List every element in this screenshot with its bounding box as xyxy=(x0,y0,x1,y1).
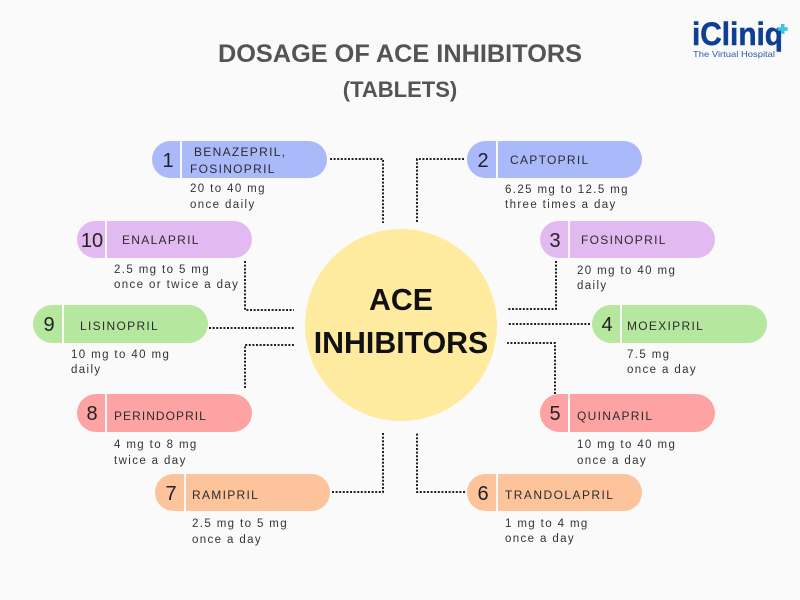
item 8: perindopril xyxy=(77,394,252,467)
central circle: ACE inhibitors: INHIBITORS xyxy=(314,327,488,360)
item 10: enalapril: 10 xyxy=(81,230,103,252)
item 10: enalapril xyxy=(77,221,252,291)
item 8: perindopril: 4 mg to 8 mg xyxy=(114,439,198,451)
item 6: trandolapril: TRANDOLAPRIL xyxy=(505,488,614,502)
logo: iCliniq: iCliniq xyxy=(692,16,783,52)
item 2: captopril: 6.25 mg to 12.5 mg xyxy=(505,184,629,196)
item 3: fosinopril: FOSINOPRIL xyxy=(581,233,667,247)
central circle: ACE inhibitors xyxy=(305,229,497,421)
item 3: fosinopril: 20 mg to 40 mg xyxy=(577,265,676,277)
item 6: trandolapril: once a day xyxy=(505,533,575,545)
item 9: lisinopril: 10 mg to 40 mg xyxy=(71,349,170,361)
item 8: perindopril: 8 xyxy=(86,403,98,425)
item 10: enalapril: once or twice a day xyxy=(114,279,239,291)
title xyxy=(218,40,582,102)
item 5: quinapril: 5 xyxy=(549,403,561,425)
item 1: benazepril, fosinopril: 20 to 40 mg xyxy=(190,183,266,195)
item 5: quinapril: 10 mg to 40 mg xyxy=(577,439,676,451)
item 7: ramipril: 2.5 mg to 5 mg xyxy=(192,518,288,530)
item 4: moexipril: 4 xyxy=(601,314,613,336)
item 6: trandolapril xyxy=(467,474,642,545)
item 8: perindopril: twice a day xyxy=(114,455,187,467)
item 9: lisinopril: 9 xyxy=(43,314,55,336)
item 5: quinapril xyxy=(540,394,715,467)
item 10: enalapril: 2.5 mg to 5 mg xyxy=(114,264,210,276)
item 1: benazepril, fosinopril: FOSINOPRIL xyxy=(190,162,276,176)
item 2: captopril: three times a day xyxy=(505,199,617,211)
item 1: benazepril, fosinopril xyxy=(152,141,327,211)
item 5: quinapril: once a day xyxy=(577,455,647,467)
connectors xyxy=(209,159,590,492)
item 9: lisinopril: LISINOPRIL xyxy=(80,319,159,333)
item 1: benazepril, fosinopril: 1 xyxy=(162,150,174,172)
item 3: fosinopril xyxy=(540,221,715,292)
item 5: quinapril: QUINAPRIL xyxy=(577,409,653,423)
item 7: ramipril: 7 xyxy=(165,483,177,505)
item 10: enalapril: ENALAPRIL xyxy=(122,233,200,247)
item 7: ramipril: RAMIPRIL xyxy=(192,488,259,502)
item 6: trandolapril: 1 mg to 4 mg xyxy=(505,518,589,530)
item 9: lisinopril xyxy=(33,305,208,376)
item 2: captopril xyxy=(467,141,642,211)
item 4: moexipril: once a day xyxy=(627,364,697,376)
item 3: fosinopril: 3 xyxy=(549,230,561,252)
item 4: moexipril xyxy=(592,305,767,376)
item 2: captopril: CAPTOPRIL xyxy=(510,153,590,167)
item 4: moexipril: MOEXIPRIL xyxy=(627,319,704,333)
item 7: ramipril xyxy=(155,474,330,546)
central circle: ACE inhibitors: ACE xyxy=(369,284,433,317)
item 8: perindopril: PERINDOPRIL xyxy=(114,409,207,423)
item 6: trandolapril: 6 xyxy=(477,483,489,505)
item 3: fosinopril: daily xyxy=(577,280,608,292)
item 1: benazepril, fosinopril: once daily xyxy=(190,199,256,211)
item 7: ramipril: once a day xyxy=(192,534,262,546)
item 9: lisinopril: daily xyxy=(71,364,102,376)
item 1: benazepril, fosinopril: BENAZEPRIL, xyxy=(194,145,286,159)
item 2: captopril: 2 xyxy=(477,150,489,172)
title: DOSAGE OF ACE INHIBITORS xyxy=(218,40,582,68)
title: (TABLETS) xyxy=(343,77,457,102)
item 4: moexipril: 7.5 mg xyxy=(627,349,670,361)
logo: iCliniq: The Virtual Hospital xyxy=(693,49,775,59)
